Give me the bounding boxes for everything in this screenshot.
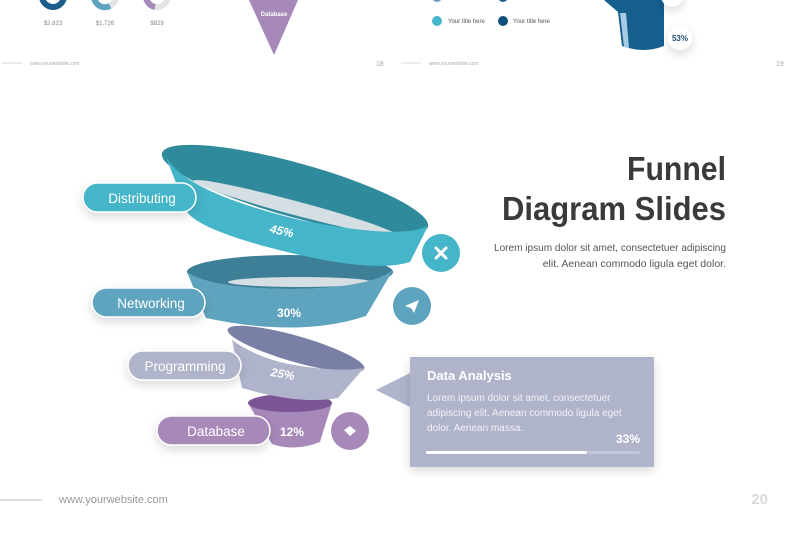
top strip: previous slides: 53% [672,34,688,43]
title: Diagram Slides [502,190,726,227]
icon: book [331,412,369,450]
callout: data analysis: 33% [616,432,640,446]
top strip: previous slides: $829 [150,21,164,27]
label: Database [157,416,270,445]
top strip: previous slides: Database [261,12,288,18]
title [502,150,726,227]
band 1: distributing [155,127,435,266]
label: Programming: Programming [144,359,226,374]
top strip: previous slides: $2,823 [44,21,63,27]
title: Funnel [627,150,726,187]
top strip: previous slides: $1,726 [96,21,115,27]
label: Networking [92,288,205,317]
label: Distributing: Distributing [108,191,176,206]
band 2: networking: 30% [277,306,301,320]
callout: data analysis: Lorem ipsum dolor sit amet, consectetuer [427,393,611,404]
label: Networking: Networking [117,296,185,311]
band 4: database [248,394,332,448]
cylinder [604,0,664,50]
description text: Lorem ipsum dolor sit amet, consectetuer adipiscing [494,242,726,254]
callout: data analysis: adipiscing elit. Aenean commodo ligula eget [427,408,622,419]
callout: data analysis [376,357,654,467]
label: Distributing [83,183,196,212]
legend [432,0,550,26]
band 3: programming [224,317,368,400]
top strip: previous slides [2,0,784,68]
legend: Your title here [448,19,485,25]
top strip: previous slides: 19 [776,61,784,68]
donut charts [42,0,168,7]
funnel diagram [155,127,435,448]
band 4: database: 12% [280,425,304,439]
band 2: networking [187,255,393,328]
description text: elit. Aenean commodo ligula eget dolor. [543,258,726,270]
footer [0,491,768,508]
footer: www.yourwebsite.com [58,494,168,506]
description text [494,242,726,270]
footer: 20 [751,491,768,508]
callout: data analysis: Data Analysis [427,368,512,383]
label: Programming [128,351,241,380]
icon: tools [422,234,460,272]
band 3: programming: 25% [269,365,296,383]
callout: data analysis: dolor. Aenean massa. [427,423,523,434]
top strip: previous slides: www.yourwebsite.com [429,61,478,67]
icon: paper plane [393,287,431,325]
small footers [2,62,421,64]
legend: Your title here [513,19,550,25]
top strip: previous slides: www.yourwebsite.com [30,61,79,67]
top strip: previous slides: 18 [376,61,384,68]
label: Database: Database [187,424,245,439]
triangle database [249,0,298,55]
band 1: distributing: 45% [268,222,295,240]
